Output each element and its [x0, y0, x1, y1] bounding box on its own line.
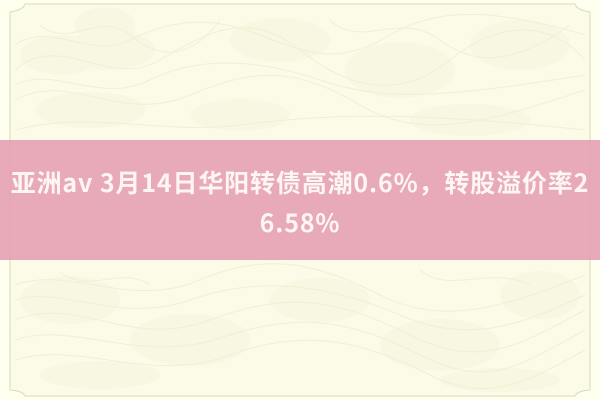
- title: 亚洲av 3月14日华阳转债高潮0.6%，转股溢价率26.58%: [11, 164, 589, 240]
- banner: [0, 140, 600, 260]
